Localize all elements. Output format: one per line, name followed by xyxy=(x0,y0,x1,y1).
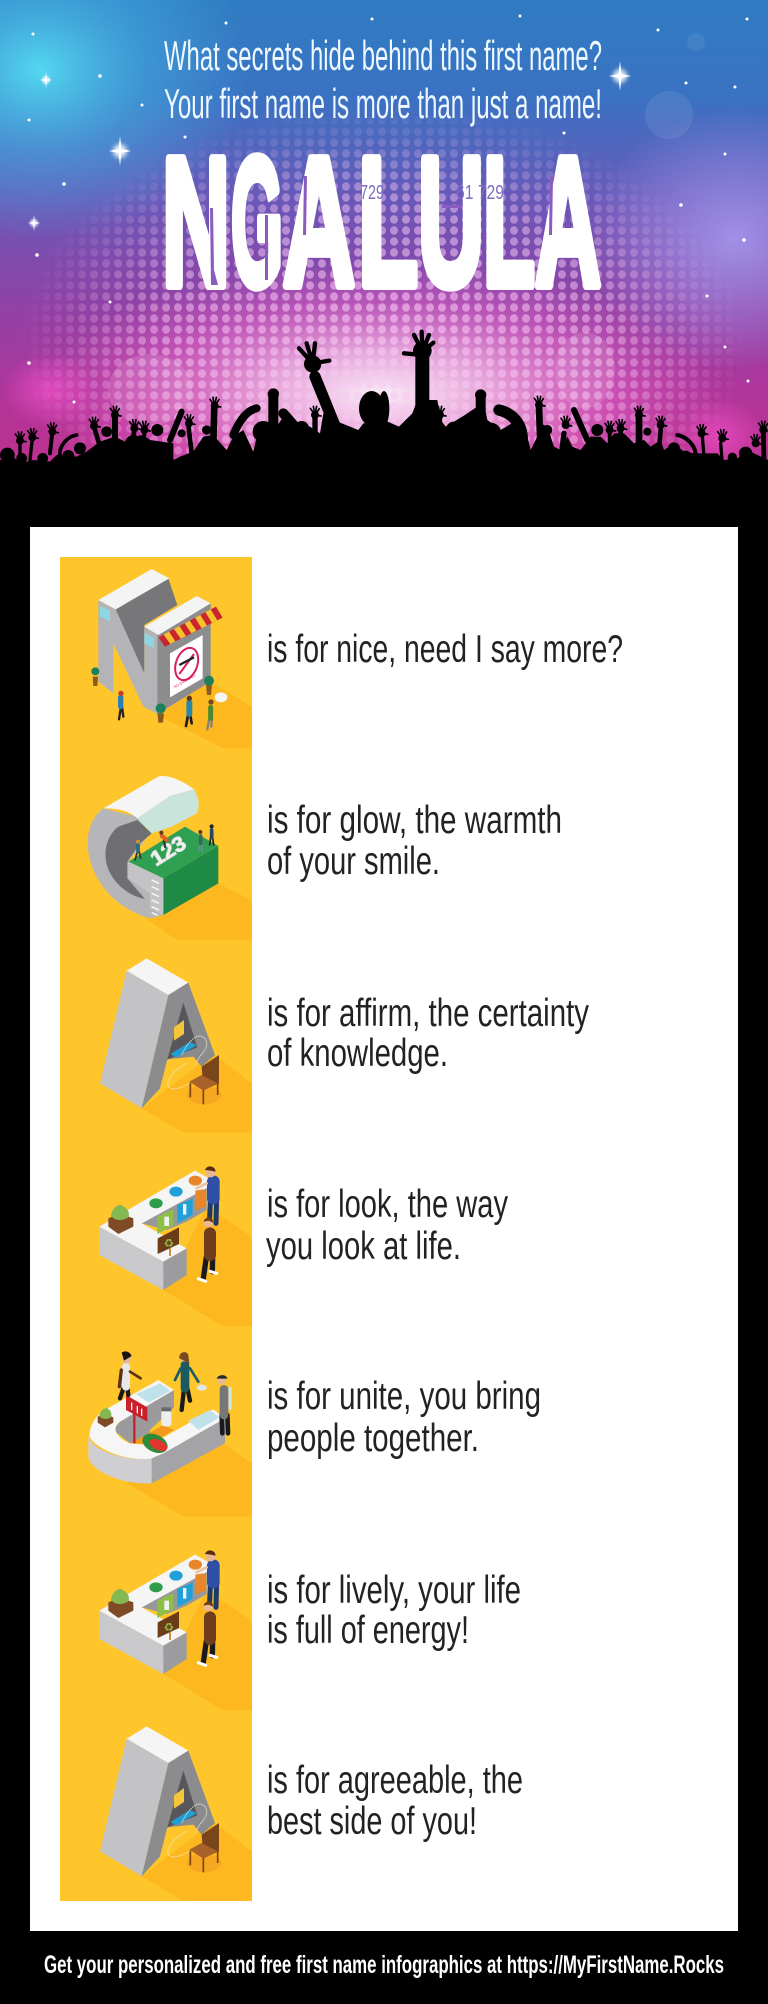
letter descriptions: is full of energy! xyxy=(267,1609,469,1652)
letter descriptions: of knowledge. xyxy=(267,1032,448,1075)
icon: letter L counter xyxy=(99,1166,252,1327)
icon: letter L counter (second) xyxy=(99,1550,252,1711)
name title: U xyxy=(418,119,484,324)
letter descriptions: is for glow, the warmth xyxy=(267,799,562,842)
name title xyxy=(162,119,601,324)
letter descriptions: is for lively, your life xyxy=(267,1569,521,1612)
letter descriptions: of your smile. xyxy=(267,840,440,883)
name title: L xyxy=(483,119,535,324)
yellow icon column xyxy=(60,557,252,1901)
icon: letter N building xyxy=(91,569,252,748)
letter descriptions: people together. xyxy=(267,1417,479,1460)
name title: L xyxy=(358,119,418,324)
name title: 729 xyxy=(360,182,384,204)
infographic: A xyxy=(535,119,601,324)
letter descriptions: is for nice, need I say more? xyxy=(267,628,623,671)
letter descriptions: is for affirm, the certainty xyxy=(267,992,589,1035)
header question text xyxy=(164,32,602,127)
icon: letter N building: NO SMOKING xyxy=(173,674,196,689)
letter descriptions: best side of you! xyxy=(267,1800,477,1843)
letter descriptions: is for agreeable, the xyxy=(267,1759,523,1802)
name title: A xyxy=(283,119,355,324)
letter descriptions xyxy=(266,628,623,1843)
icon: letter G building: 123 xyxy=(146,832,190,871)
sparkles xyxy=(27,14,749,404)
icon: letter A building (second) xyxy=(100,1726,252,1901)
letter descriptions: you look at life. xyxy=(266,1225,461,1268)
name title: N xyxy=(162,119,230,324)
header background xyxy=(0,0,768,464)
name title: G xyxy=(231,119,283,324)
icon: letter G building xyxy=(88,776,252,940)
white content panel xyxy=(30,527,738,1931)
name title: 61 729 xyxy=(456,182,504,204)
letter descriptions: is for unite, you bring xyxy=(267,1375,541,1418)
crowd silhouette xyxy=(0,332,768,480)
icon: letter A building xyxy=(100,958,252,1133)
icon: letter L counter: ♻ xyxy=(164,1236,174,1250)
icon: letter U counter xyxy=(88,1351,252,1517)
letter descriptions: is for look, the way xyxy=(267,1183,508,1226)
